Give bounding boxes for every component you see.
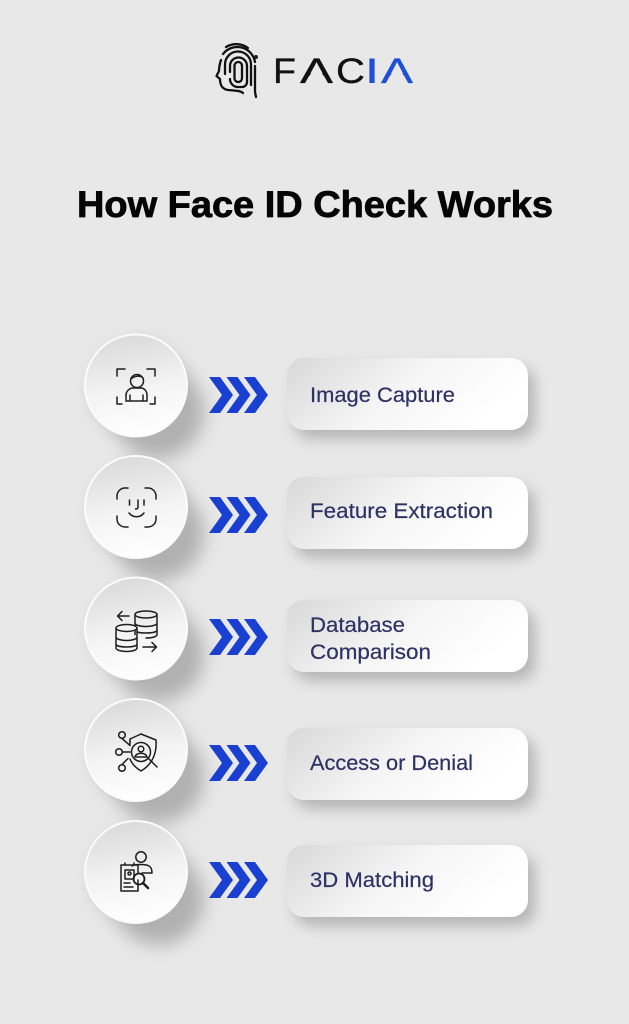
pill: Feature Extraction	[310, 500, 493, 523]
circle with identity document icon	[85, 821, 187, 923]
arrow	[209, 497, 268, 533]
pill	[287, 728, 535, 809]
wordmark	[273, 52, 414, 91]
circle with database icon	[85, 578, 187, 680]
arrow	[209, 619, 268, 655]
step 3: Database Comparison	[85, 578, 535, 681]
circle with camera-frame icon	[85, 334, 187, 436]
wordmark: F	[273, 52, 296, 91]
pill: Image Capture	[310, 384, 455, 407]
circle with shield icon	[85, 699, 187, 801]
step 4: Access or Denial	[85, 699, 535, 809]
pill: Database	[310, 614, 405, 637]
icon: fingerprint head	[216, 44, 257, 97]
wordmark: C	[336, 52, 365, 91]
pill	[287, 845, 535, 926]
circle with face scan icon	[85, 456, 187, 558]
title: How Face ID Check Works	[77, 184, 553, 225]
pill: Comparison	[310, 641, 431, 664]
step 5: 3D Matching	[85, 821, 535, 926]
step 1: Image Capture	[85, 334, 535, 439]
pill	[287, 600, 535, 681]
pill	[287, 477, 535, 558]
step 2: Feature Extraction	[85, 456, 535, 558]
wordmark: A	[300, 52, 334, 91]
pill: 3D Matching	[310, 869, 434, 892]
arrow	[209, 745, 268, 781]
logo: FACIA	[216, 44, 414, 97]
arrow	[209, 377, 268, 413]
pill	[287, 358, 535, 439]
wordmark: I	[367, 52, 377, 91]
pill: Access or Denial	[310, 752, 473, 775]
arrow	[209, 862, 268, 898]
wordmark: A	[381, 52, 414, 91]
